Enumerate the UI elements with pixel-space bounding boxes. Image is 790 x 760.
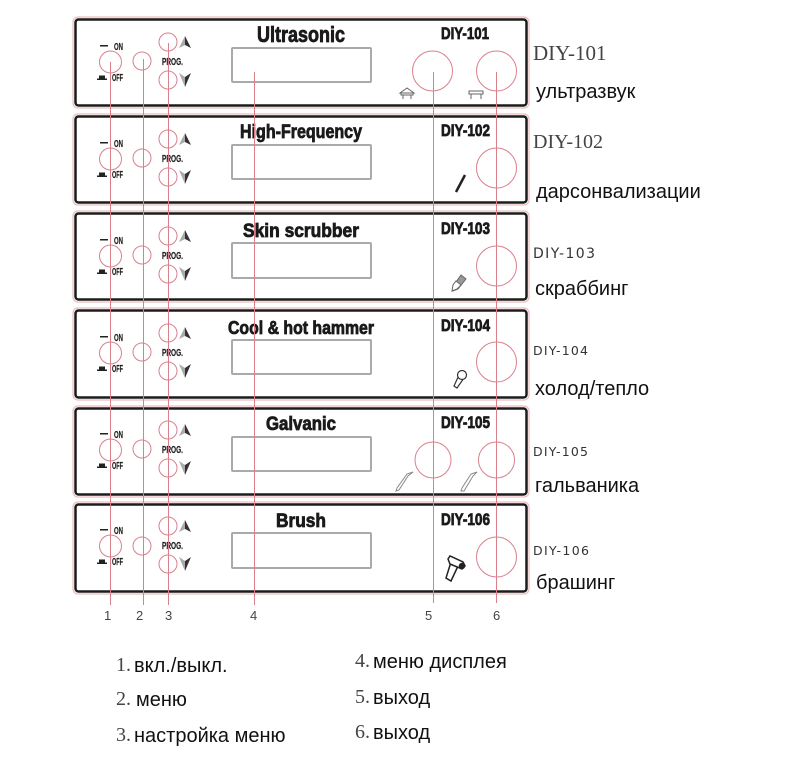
panel title: Galvanic: Galvanic	[266, 414, 336, 435]
legend: right column	[355, 650, 507, 744]
power switch	[97, 236, 123, 278]
adjust buttons	[159, 517, 191, 573]
display	[232, 437, 371, 471]
leader numbers: 4	[250, 608, 257, 623]
legend: left column: меню	[136, 689, 187, 711]
power switch: OFF	[112, 73, 123, 84]
adjust buttons: PROG.	[162, 348, 183, 359]
display	[232, 243, 371, 278]
panel title: High-Frequency: High-Frequency	[240, 122, 362, 143]
display	[232, 533, 371, 568]
menu button	[133, 52, 151, 70]
power switch: ON	[114, 430, 123, 441]
output 5	[415, 442, 451, 478]
panel: DIY-104 cool and hot hammer	[73, 308, 529, 400]
icon: scrubber handpiece	[452, 275, 466, 291]
icon: brush handpiece	[446, 556, 465, 581]
adjust buttons: PROG.	[162, 251, 183, 262]
legend: left column: вкл./выкл.	[134, 655, 228, 677]
panel: DIY-105 galvanic	[73, 406, 529, 497]
side labels	[533, 41, 701, 594]
legend: right column: 5.	[355, 686, 370, 708]
power switch: ON	[114, 236, 123, 247]
model label: DIY-103: DIY-103	[441, 219, 490, 238]
leader lines	[110, 43, 496, 605]
leader numbers	[104, 608, 500, 623]
menu button	[133, 537, 151, 555]
power switch: ON	[114, 333, 123, 344]
legend: right column: 6.	[355, 721, 370, 743]
panel title: Cool & hot hammer: Cool & hot hammer	[228, 318, 374, 338]
adjust buttons	[159, 421, 191, 477]
power switch: OFF	[112, 557, 123, 568]
leader numbers: 3	[165, 608, 172, 623]
power switch: ON	[114, 526, 123, 537]
legend: left column: настройка меню	[134, 725, 286, 747]
side labels: DIY-106	[533, 543, 589, 558]
adjust buttons	[159, 227, 191, 283]
power switch: ON	[114, 42, 123, 53]
model label: DIY-101: DIY-101	[441, 24, 489, 43]
power switch: OFF	[112, 267, 123, 278]
power switch: OFF	[112, 364, 123, 375]
legend: right column: выход	[373, 722, 430, 744]
icon: galvanic electrode 2	[461, 472, 477, 491]
legend: left column: 1.	[116, 654, 131, 676]
power switch	[97, 333, 123, 375]
adjust buttons	[159, 324, 191, 380]
panel: DIY-102 high-frequency	[73, 114, 529, 205]
leader numbers: 5	[425, 608, 432, 623]
adjust buttons: PROG.	[162, 445, 183, 456]
side labels: DIY-101	[533, 41, 606, 65]
side labels: дарсонвализации	[536, 181, 701, 203]
panel title: Ultrasonic: Ultrasonic	[257, 22, 345, 47]
menu button	[133, 246, 151, 264]
icon: galvanic electrode 1	[396, 472, 413, 491]
leader numbers: 6	[493, 608, 500, 623]
output 6	[476, 148, 516, 188]
output 6	[476, 342, 516, 382]
output 6	[478, 442, 514, 478]
output 6	[476, 537, 516, 577]
icon: ultrasonic probe 1	[400, 88, 414, 99]
panel: DIY-106 brush	[73, 502, 529, 594]
legend: right column: 4.	[355, 650, 370, 672]
leader numbers: 2	[136, 608, 143, 623]
adjust buttons	[159, 130, 191, 186]
menu button	[133, 343, 151, 361]
icon: hammer handpiece	[454, 370, 466, 388]
legend: right column: меню дисплея	[373, 651, 507, 673]
model label: DIY-106: DIY-106	[441, 510, 490, 529]
output 6	[476, 246, 516, 286]
legend: right column: выход	[373, 687, 430, 709]
power switch	[97, 42, 123, 84]
panel: DIY-103 skin scrubber	[73, 211, 529, 302]
icon: high-frequency wand	[456, 175, 465, 192]
adjust buttons: PROG.	[162, 57, 183, 68]
power switch	[97, 526, 123, 568]
side labels: DIY-103	[533, 246, 595, 262]
side labels: скраббинг	[535, 278, 628, 300]
side labels: холод/тепло	[535, 378, 649, 400]
power switch	[97, 139, 123, 181]
panel title: Skin scrubber: Skin scrubber	[243, 221, 360, 242]
panel title: Brush: Brush	[276, 511, 326, 532]
output 6	[476, 51, 516, 91]
leader numbers: 1	[104, 608, 111, 623]
model label: DIY-102: DIY-102	[441, 121, 490, 140]
power switch	[97, 430, 123, 472]
side labels: ультразвук	[536, 81, 636, 103]
power switch: ON	[114, 139, 123, 150]
icon: ultrasonic probe 2	[469, 91, 483, 99]
output 5	[412, 51, 452, 91]
adjust buttons	[159, 33, 191, 89]
side labels: DIY-105	[533, 444, 588, 459]
menu button	[133, 440, 151, 458]
side labels: DIY-102	[533, 131, 603, 153]
display	[232, 145, 371, 179]
power switch: OFF	[112, 461, 123, 472]
adjust buttons: PROG.	[162, 541, 183, 552]
side labels: DIY-104	[533, 343, 588, 358]
legend: left column: 2.	[116, 688, 131, 710]
panel: DIY-101 ultrasonic	[73, 17, 529, 108]
model label: DIY-105: DIY-105	[441, 413, 490, 432]
side labels: брашинг	[536, 572, 615, 594]
adjust buttons: PROG.	[162, 154, 183, 165]
legend: left column: 3.	[116, 724, 131, 746]
menu button	[133, 149, 151, 167]
power switch: OFF	[112, 170, 123, 181]
display	[232, 48, 371, 82]
model label: DIY-104: DIY-104	[441, 316, 490, 335]
legend: left column	[116, 654, 286, 747]
side labels: гальваника	[535, 475, 640, 497]
display	[232, 340, 371, 374]
